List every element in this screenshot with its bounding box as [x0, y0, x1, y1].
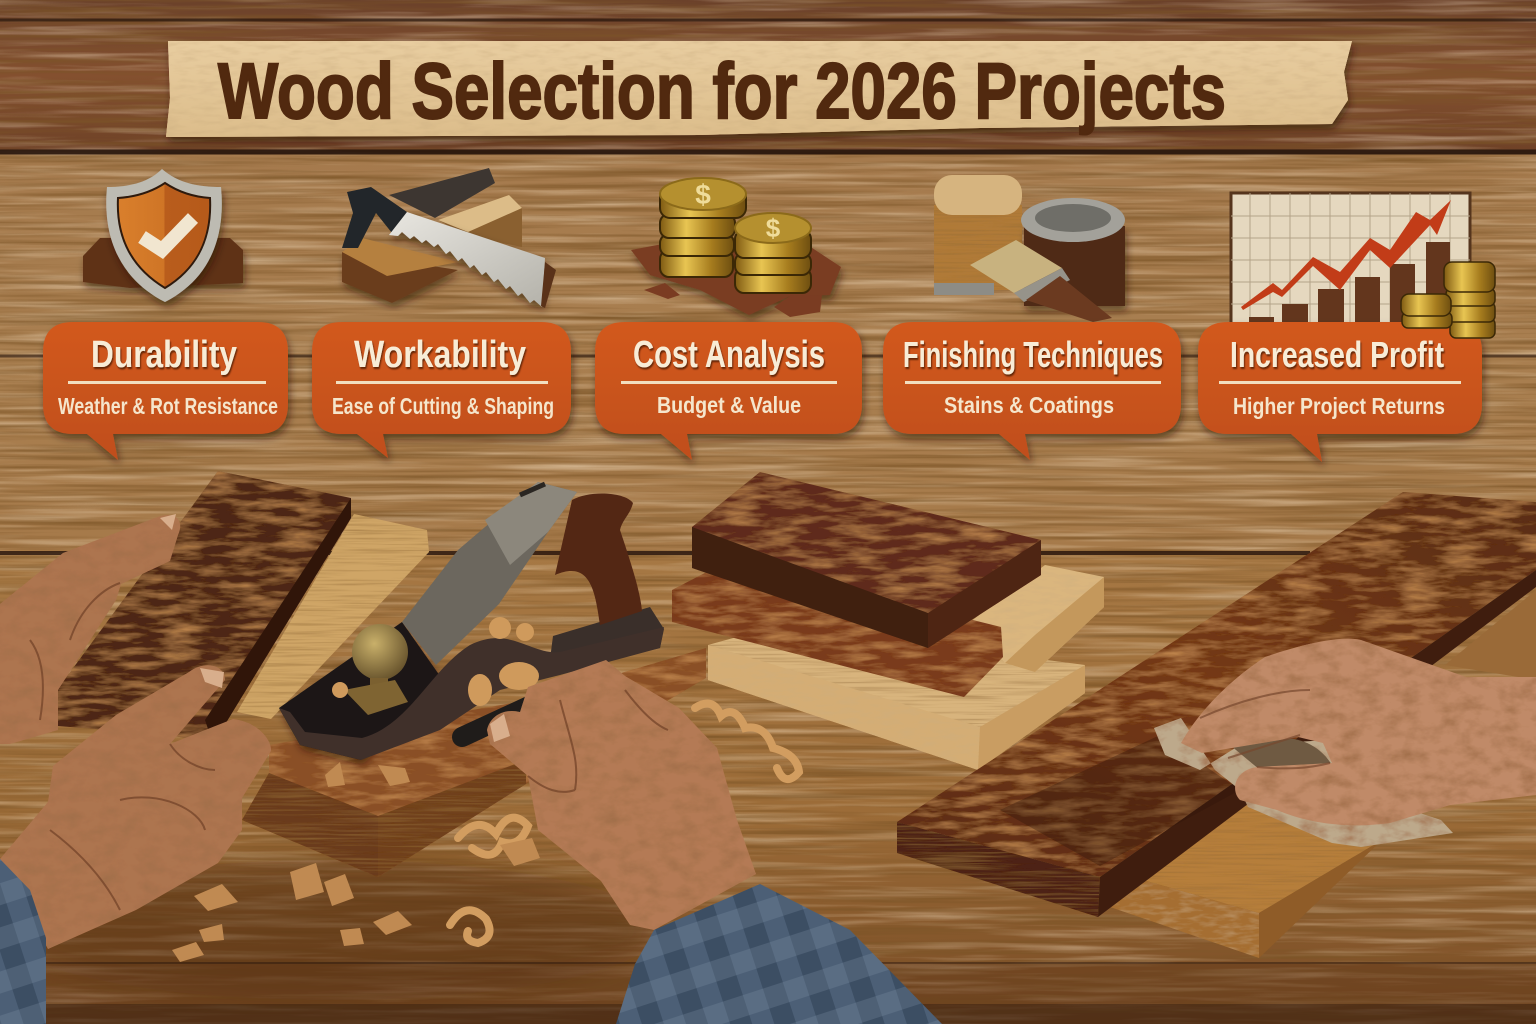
hand — [1181, 639, 1536, 825]
icon: stacked gold coins on wood: $ — [766, 213, 781, 243]
icon: saw on wood blocks — [342, 168, 556, 308]
right hand with cloth — [1154, 639, 1536, 847]
wood shavings and chips — [172, 704, 799, 962]
panel: Finishing Techniques: Finishing Techniques — [903, 334, 1163, 375]
icon: gold coins on profit chart — [1401, 262, 1495, 338]
panel: Workability: Ease of Cutting & Shaping — [332, 393, 554, 419]
title sign — [166, 41, 1352, 137]
panel: Increased Profit — [1198, 322, 1482, 462]
panel: Increased Profit: Higher Project Returns — [1233, 393, 1445, 419]
icon: stacked gold coins on wood: $ — [695, 179, 711, 210]
center hand — [487, 660, 756, 930]
panel: Increased Profit: Increased Profit — [1230, 334, 1444, 375]
workbench block under plane — [242, 648, 706, 877]
icon: wood can, paint bucket and brush — [934, 175, 1125, 322]
handle — [555, 494, 642, 625]
center plaid sleeve — [616, 884, 942, 1024]
panel: Finishing Techniques — [883, 322, 1181, 460]
brass knob — [344, 624, 408, 715]
panel: Cost Analysis — [595, 322, 862, 460]
left lower hand — [0, 665, 271, 949]
center stack of boards — [672, 472, 1104, 770]
panel: Finishing Techniques: Stains & Coatings — [944, 392, 1114, 418]
panel: Cost Analysis: Cost Analysis — [633, 334, 825, 376]
icon: shield on wood — [83, 169, 243, 302]
panel: Durability: Durability — [91, 334, 237, 376]
panel: Workability: Workability — [354, 334, 526, 376]
left upper hand — [0, 514, 180, 744]
icon: stacked gold coins on wood — [631, 178, 841, 317]
left boards held in hand — [57, 471, 429, 744]
right finished board — [897, 492, 1536, 958]
panel: Cost Analysis: Budget & Value — [657, 392, 801, 418]
hand plane tool — [279, 482, 664, 760]
plane shavings — [332, 617, 539, 706]
side wall — [279, 627, 664, 760]
panel: Durability: Weather & Rot Resistance — [58, 393, 278, 419]
adjuster — [462, 694, 555, 737]
icon: profit chart with arrow — [1231, 193, 1470, 325]
panel: Durability — [43, 322, 288, 460]
plane bed — [279, 622, 440, 760]
title: Wood Selection for 2026 Projects — [218, 46, 1226, 135]
cloth — [1154, 718, 1453, 847]
lever cap and frog — [402, 482, 577, 665]
left sleeve — [0, 859, 46, 1024]
plane base — [548, 607, 664, 675]
panel: Workability — [312, 322, 571, 458]
